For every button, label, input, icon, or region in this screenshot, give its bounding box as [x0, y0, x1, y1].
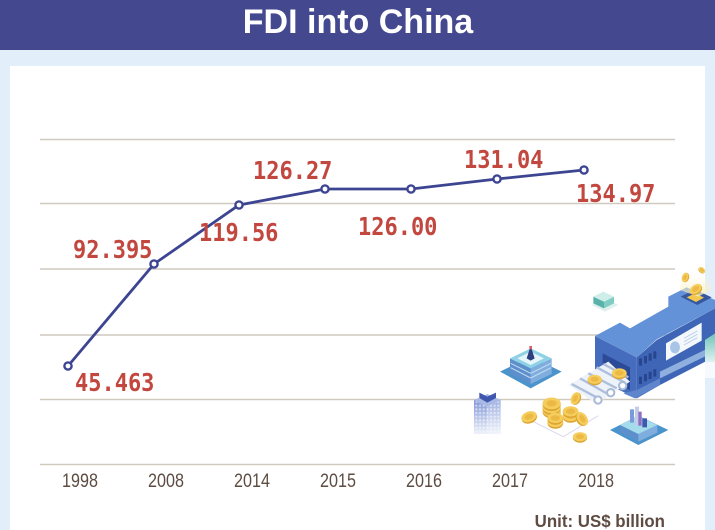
icon: tiered platform with tower [500, 346, 562, 388]
header bar [0, 0, 715, 50]
illustration: factory and coins [474, 266, 715, 445]
icon: bar chart platform [610, 407, 668, 445]
data value labels [73, 145, 655, 397]
data point markers [64, 166, 588, 370]
x-axis year labels: 2016 [406, 470, 442, 491]
icon: conveyor belt [568, 362, 630, 407]
x-axis year labels: 1998 [62, 470, 98, 491]
line chart [40, 140, 675, 464]
x-axis year labels [62, 470, 614, 491]
data value labels: 126.00 [358, 212, 437, 241]
data value labels: 134.97 [576, 179, 655, 208]
icon: teal cube [592, 292, 618, 312]
data value labels: 119.56 [199, 218, 278, 247]
data line [68, 170, 584, 366]
x-axis year labels: 2017 [492, 470, 528, 491]
x-axis year labels: 2018 [578, 470, 614, 491]
data value labels: 126.27 [253, 156, 332, 185]
icon: teal cube at right edge [705, 333, 715, 362]
icon: office tower [474, 393, 501, 434]
x-axis year labels: 2008 [148, 470, 184, 491]
data value labels: 131.04 [464, 145, 543, 174]
x-axis year labels: 2015 [320, 470, 356, 491]
data value labels: 92.395 [73, 235, 152, 264]
data value labels: 45.463 [75, 368, 154, 397]
title: FDI into China [243, 3, 474, 41]
icon: coin stacks [520, 397, 598, 443]
x-axis year labels: 2014 [234, 470, 270, 491]
icon: machine [595, 266, 715, 398]
